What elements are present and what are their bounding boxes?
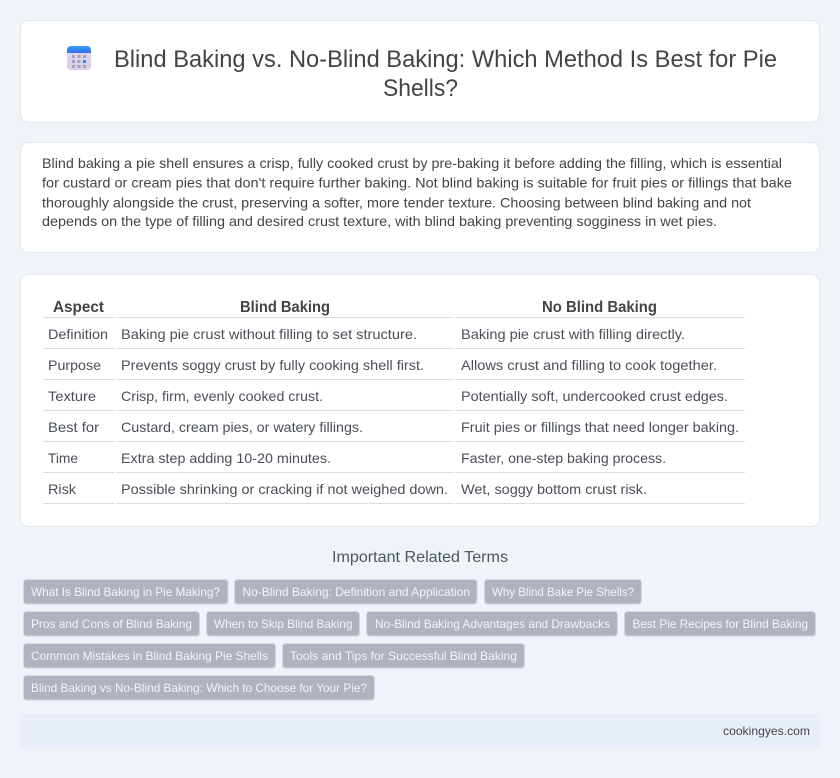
- heading: important related terms: Important Related Terms: [332, 549, 508, 566]
- table row: definition: Baking pie crust with filling directly.: [461, 326, 685, 342]
- text block: introduction: [42, 155, 792, 229]
- table row: time: Time: [48, 450, 78, 466]
- related term tags: Why Blind Bake Pie Shells?: [492, 585, 634, 599]
- table row: texture: Potentially soft, undercooked crust edges.: [461, 388, 728, 404]
- related term tags: No-Blind Baking Advantages and Drawbacks: [375, 617, 610, 631]
- title: [114, 46, 777, 102]
- panel: title header: [20, 20, 820, 122]
- table row: best for: Best for: [48, 419, 99, 435]
- title: Blind Baking vs. No-Blind Baking: Which Method Is Best for Pie: [114, 46, 777, 73]
- table header: No Blind Baking: [542, 299, 657, 316]
- table row: best for: Custard, cream pies, or watery fillings.: [121, 419, 363, 435]
- table header: [53, 299, 657, 316]
- text block: introduction: Blind baking a pie shell ensures a crisp, fully cooked crust by pre-baking it before adding the filling, which is essential: [42, 155, 782, 171]
- table row: texture: Texture: [48, 388, 96, 404]
- table row: purpose: Prevents soggy crust by fully cooking shell first.: [121, 357, 424, 373]
- text block: introduction: depends on the type of filling and desired crust texture, with blind baking preventing sogginess in wet pies.: [42, 213, 717, 229]
- table row: purpose: Allows crust and filling to cook together.: [461, 357, 717, 373]
- table header: Blind Baking: [240, 299, 330, 316]
- table row: definition: [48, 326, 685, 342]
- text block: introduction: thoroughly alongside the crust, preserving a softer, more tender texture. Choosing between blind baking and not: [42, 194, 751, 210]
- table row: definition: Definition: [48, 326, 108, 342]
- table row: texture: Crisp, firm, evenly cooked crust.: [121, 388, 323, 404]
- related term tags: Blind Baking vs No-Blind Baking: Which to Choose for Your Pie?: [31, 681, 367, 695]
- table row: risk: Wet, soggy bottom crust risk.: [461, 481, 647, 497]
- panel: introduction text: [20, 142, 820, 252]
- footer: [20, 714, 820, 748]
- table row: best for: Fruit pies or fillings that need longer baking.: [461, 419, 739, 435]
- related term tags: Tools and Tips for Successful Blind Baking: [290, 649, 517, 663]
- table header: Aspect: [53, 299, 105, 316]
- table row: risk: Possible shrinking or cracking if not weighed down.: [121, 481, 448, 497]
- related term tags: What Is Blind Baking in Pie Making?: [31, 585, 220, 599]
- table row: risk: Risk: [48, 481, 77, 497]
- title: Shells?: [383, 75, 458, 102]
- table row: purpose: Purpose: [48, 357, 101, 373]
- related term tags: [24, 580, 816, 700]
- panel: comparison table: [20, 274, 820, 526]
- table row: time: Faster, one-step baking process.: [461, 450, 666, 466]
- text block: introduction: for custard or cream pies that don't require further baking. Not blind baking is suitable for fruit pies or fillings that bake: [42, 174, 792, 190]
- table row: risk: [48, 481, 647, 497]
- table row: time: [48, 450, 666, 466]
- related term tags: Common Mistakes in Blind Baking Pie Shells: [31, 649, 268, 663]
- table row: best for: [48, 419, 739, 435]
- table row: definition: Baking pie crust without filling to set structure.: [121, 326, 417, 342]
- related term tags: No-Blind Baking: Definition and Application: [242, 585, 470, 599]
- related term tags: Pros and Cons of Blind Baking: [31, 617, 192, 631]
- related term tags: When to Skip Blind Baking: [214, 617, 352, 631]
- footer: cookingyes.com: [723, 724, 810, 738]
- table row: purpose: [48, 357, 717, 373]
- related term tags: Best Pie Recipes for Blind Baking: [632, 617, 808, 631]
- table row: time: Extra step adding 10-20 minutes.: [121, 450, 331, 466]
- icon: calendar: [67, 46, 91, 70]
- table row: texture: [48, 388, 728, 404]
